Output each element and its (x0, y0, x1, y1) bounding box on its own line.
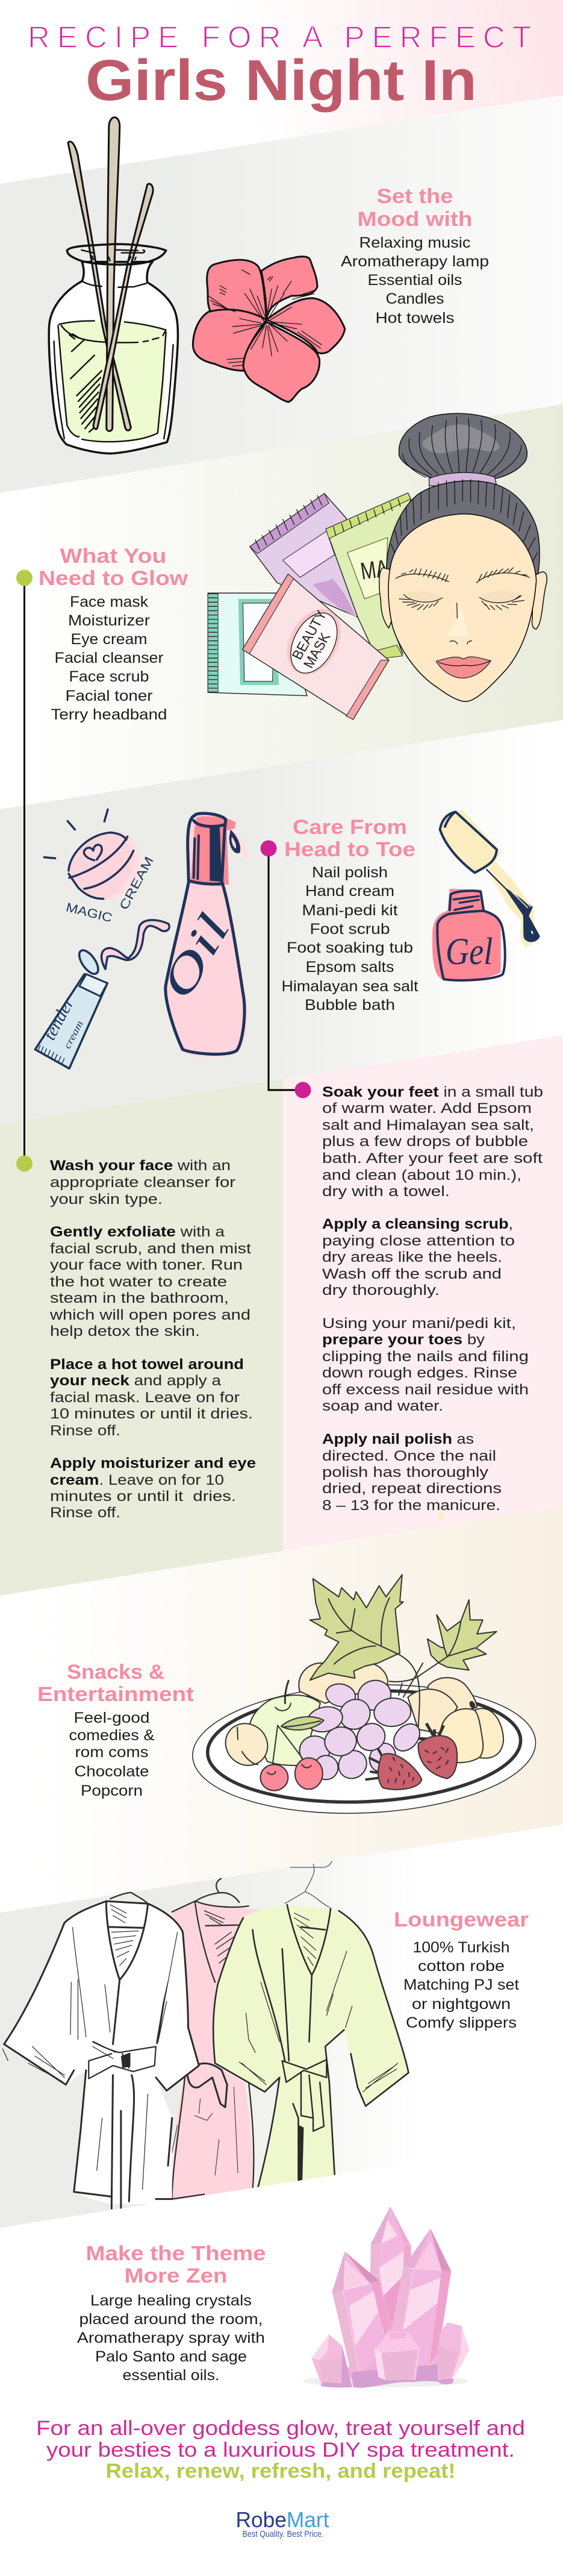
logo: RobeMart: Best Quality. Best Price. (242, 2529, 324, 2539)
what you need to glow text: Moisturizer (68, 612, 150, 629)
care from head to toe text: Mani-pedi kit (302, 902, 398, 919)
illustration: reed diffuser (49, 118, 178, 454)
steps: foot routine: dry areas like the heels. (322, 1249, 502, 1265)
left crystal (332, 2252, 391, 2374)
grapes (300, 1675, 425, 1781)
plate (189, 1678, 540, 1820)
illustration: tender cream tube: cream (61, 1018, 86, 1051)
steps: face routine: your skin type. (50, 1191, 163, 1208)
what you need to glow text: Face mask (70, 594, 149, 610)
what you need to glow text: Face scrub (69, 668, 149, 685)
care from head to toe text: Head to Toe (284, 838, 415, 861)
steps: foot routine: dry with a towel. (322, 1183, 450, 1200)
title: RECIPE FOR A PERFECT (28, 20, 531, 54)
illustration: three hanging robes (2, 1861, 409, 2208)
care from head to toe text: Nail polish (312, 864, 388, 881)
pink robe (169, 1901, 261, 2204)
set the mood text: Mood with (358, 208, 472, 231)
illustration: woman's face with hair bun (379, 413, 547, 701)
what you need to glow text: Eye cream (71, 631, 147, 648)
steps: face routine (49, 1158, 256, 1521)
steps: face routine: Gently exfoliate with a (50, 1224, 225, 1240)
steps: foot routine: bath. After your feet are soft (322, 1150, 543, 1167)
steps: face routine: cream . Leave on for 10 (50, 1472, 224, 1488)
snacks and entertainment text: Popcorn (81, 1782, 143, 1799)
make the theme more zen text: Make the Theme (86, 2242, 266, 2265)
snacks and entertainment text (37, 1661, 194, 1799)
steps: face routine: Apply moisturizer and eye (50, 1455, 256, 1471)
make the theme more zen text: Palo Santo and sage (95, 2348, 247, 2365)
packet: lilac (250, 494, 358, 617)
steps: face routine: help detox the skin. (50, 1323, 200, 1340)
steps: foot routine: off excess nail residue with (322, 1382, 529, 1398)
make the theme more zen text: placed around the room, (79, 2311, 263, 2328)
small right crystal (438, 2322, 469, 2380)
steps: foot routine: polish has thoroughly (322, 1464, 489, 1481)
steps: foot routine: directed. Once the nail (322, 1448, 496, 1464)
small center crystal (375, 2332, 420, 2380)
hangers (110, 1861, 332, 1907)
steps: foot routine: dried, repeat directions (322, 1481, 502, 1497)
steps: foot routine: plus a few drops of bubble (322, 1133, 528, 1150)
illustration: fruit plate (189, 1575, 540, 1820)
packet: green: MA (359, 554, 390, 585)
steps: face routine: minutes or until it dries. (50, 1488, 236, 1505)
gel bottle (432, 889, 505, 980)
green robe (213, 1905, 409, 2192)
polish brush (440, 809, 540, 948)
packet: beauty mask: BEAUTY (288, 608, 330, 662)
text: magic cream label: CREAM (117, 854, 157, 912)
steps: foot routine: paying close attention to (322, 1233, 515, 1249)
strawberries (365, 1723, 457, 1790)
face shape (388, 514, 537, 701)
steps: face routine: Rinse off. (50, 1423, 120, 1439)
make the theme more zen text: Aromatherapy spray with (77, 2330, 265, 2346)
loungewear text: or nightgown (412, 1996, 511, 2013)
steps: face routine: facial scrub, and then mist (50, 1241, 251, 1257)
loungewear text: Comfy slippers (406, 2014, 517, 2031)
timeline: green connector (16, 570, 33, 1171)
crystal body fill (347, 2326, 441, 2384)
snacks and entertainment text: Chocolate (75, 1763, 149, 1780)
hair bun (399, 413, 527, 486)
care from head to toe text: Epsom salts (306, 959, 394, 976)
what you need to glow text: Facial cleanser (54, 650, 164, 666)
vine leaves (310, 1575, 497, 1728)
make the theme more zen text: Large healing crystals (90, 2292, 252, 2309)
steps: face routine: 10 minutes or until it dries. (50, 1406, 253, 1422)
steps: face routine: steam in the bathroom, (50, 1290, 229, 1306)
base crust (351, 2364, 453, 2388)
set the mood text: Essential oils (367, 272, 462, 289)
illustration: pink plumeria flower (193, 257, 345, 402)
snacks and entertainment text: Snacks & (67, 1661, 164, 1684)
what you need to glow text: What You (60, 545, 166, 568)
steps: foot routine: clipping the nails and filing (322, 1349, 529, 1365)
closing message: Relax, renew, refresh, and repeat! (106, 2460, 455, 2483)
make the theme more zen text (77, 2242, 266, 2384)
steps: foot routine: 8 – 13 for the manicure. (322, 1497, 500, 1514)
illustration: tender cream tube: tender (40, 994, 78, 1044)
closing message (36, 2417, 525, 2483)
base front (321, 2379, 453, 2387)
ears (379, 568, 547, 629)
packet: beauty mask: MASK (300, 630, 334, 671)
steps: foot routine: prepare your toes by (322, 1332, 485, 1348)
make the theme more zen text: essential oils. (123, 2367, 219, 2384)
illustration: oil bottle: Oil (151, 905, 240, 1008)
set the mood text (341, 185, 489, 327)
set the mood text: Candles (385, 290, 444, 307)
illustration: face mask packets (208, 493, 411, 719)
small left crystal (311, 2334, 351, 2386)
facial features (396, 568, 529, 678)
back hair (387, 480, 540, 583)
loungewear text: 100% Turkish (413, 1939, 509, 1956)
loungewear text (394, 1908, 529, 2031)
closing message: your besties to a luxurious DIY spa treatment. (46, 2439, 515, 2462)
steps: foot routine: of warm water. Add Epsom (322, 1100, 532, 1117)
steps: foot routine: down rough edges. Rinse (322, 1365, 517, 1381)
snacks and entertainment text: comedies & (69, 1727, 155, 1744)
steps: foot routine: Using your mani/pedi kit, (322, 1315, 516, 1332)
steps: face routine: facial mask. Leave on for (50, 1390, 240, 1406)
snacks and entertainment text: Feel-good (73, 1709, 149, 1726)
what you need to glow text: Terry headband (51, 706, 167, 723)
illustration: pink crystals (303, 2207, 469, 2388)
illustration: oil bottle (151, 813, 249, 1058)
snacks and entertainment text: rom coms (75, 1744, 148, 1761)
set the mood text: Set the (377, 185, 453, 208)
steps: foot routine: soap and water. (322, 1398, 443, 1414)
what you need to glow text: Facial toner (65, 688, 153, 704)
steps: foot routine: salt and Himalayan sea salt, (322, 1117, 534, 1133)
loungewear text: Loungewear (394, 1908, 529, 1931)
snacks and entertainment text: Entertainment (37, 1683, 194, 1706)
back crystal (370, 2207, 411, 2334)
what you need to glow text (39, 545, 188, 723)
timeline: magenta connector (260, 840, 311, 1098)
steps: foot routine: Apply a cleansing scrub , (322, 1216, 513, 1232)
steps: foot routine: Wash off the scrub and (322, 1266, 502, 1282)
right crystal (391, 2228, 451, 2374)
what you need to glow text: Need to Glow (39, 567, 188, 590)
care from head to toe text: Himalayan sea salt (282, 978, 418, 995)
set the mood text: Aromatherapy lamp (341, 253, 489, 270)
gel bottle: Gel (446, 930, 493, 973)
steps: face routine: your neck and apply a (50, 1373, 221, 1389)
text: magic cream label: MAGIC (64, 900, 114, 925)
back fruit (299, 1663, 477, 1734)
steps: face routine: Wash your face with an (50, 1158, 231, 1174)
illustration: magic cream jar (44, 809, 142, 900)
steps: face routine: appropriate cleanser for (50, 1174, 235, 1191)
illustration: tender cream tube (35, 920, 169, 1068)
steps: foot routine: dry thoroughly. (322, 1282, 440, 1299)
care from head to toe text: Care From (293, 816, 407, 839)
set the mood text: Hot towels (376, 310, 454, 327)
make the theme more zen text: More Zen (124, 2264, 228, 2287)
white robe (2, 1901, 199, 2208)
closing message: For an all-over goddess glow, treat yourself and (36, 2417, 525, 2440)
set the mood text: Relaxing music (359, 234, 471, 251)
steps: face routine: which will open pores and (49, 1307, 250, 1323)
logo: RobeMart: RobeMart (236, 2507, 329, 2532)
care from head to toe text: Foot scrub (309, 921, 390, 938)
packet: green (326, 493, 411, 659)
care from head to toe text: Bubble bath (305, 997, 395, 1014)
steps: face routine: the hot water to create (50, 1274, 227, 1290)
care from head to toe text: Foot soaking tub (287, 939, 413, 956)
text: magic cream label (64, 854, 157, 925)
loungewear text: cotton robe (418, 1958, 505, 1975)
packet: beauty mask (243, 574, 389, 719)
steps: foot routine: and clean (about 10 min.), (322, 1167, 521, 1183)
apple and peaches (220, 1681, 503, 1770)
steps: foot routine: Soak your feet in a small tub (322, 1084, 543, 1100)
cherries (260, 1717, 324, 1791)
steps: face routine: Place a hot towel around (50, 1356, 244, 1373)
loungewear text: Matching PJ set (403, 1976, 519, 1993)
illustration: nail polish brush and gel bottle (432, 809, 540, 980)
steps: face routine: your face with toner. Run (50, 1257, 243, 1273)
care from head to toe text: Hand cream (305, 883, 394, 900)
title: Girls Night In (86, 48, 477, 113)
stray dot (438, 1512, 444, 1518)
steps: foot routine (322, 1084, 543, 1514)
packet: mint (208, 593, 307, 696)
title (28, 20, 531, 113)
steps: foot routine: Apply nail polish as (322, 1431, 474, 1447)
care from head to toe text (282, 816, 418, 1014)
steps: face routine: Rinse off. (50, 1505, 120, 1521)
